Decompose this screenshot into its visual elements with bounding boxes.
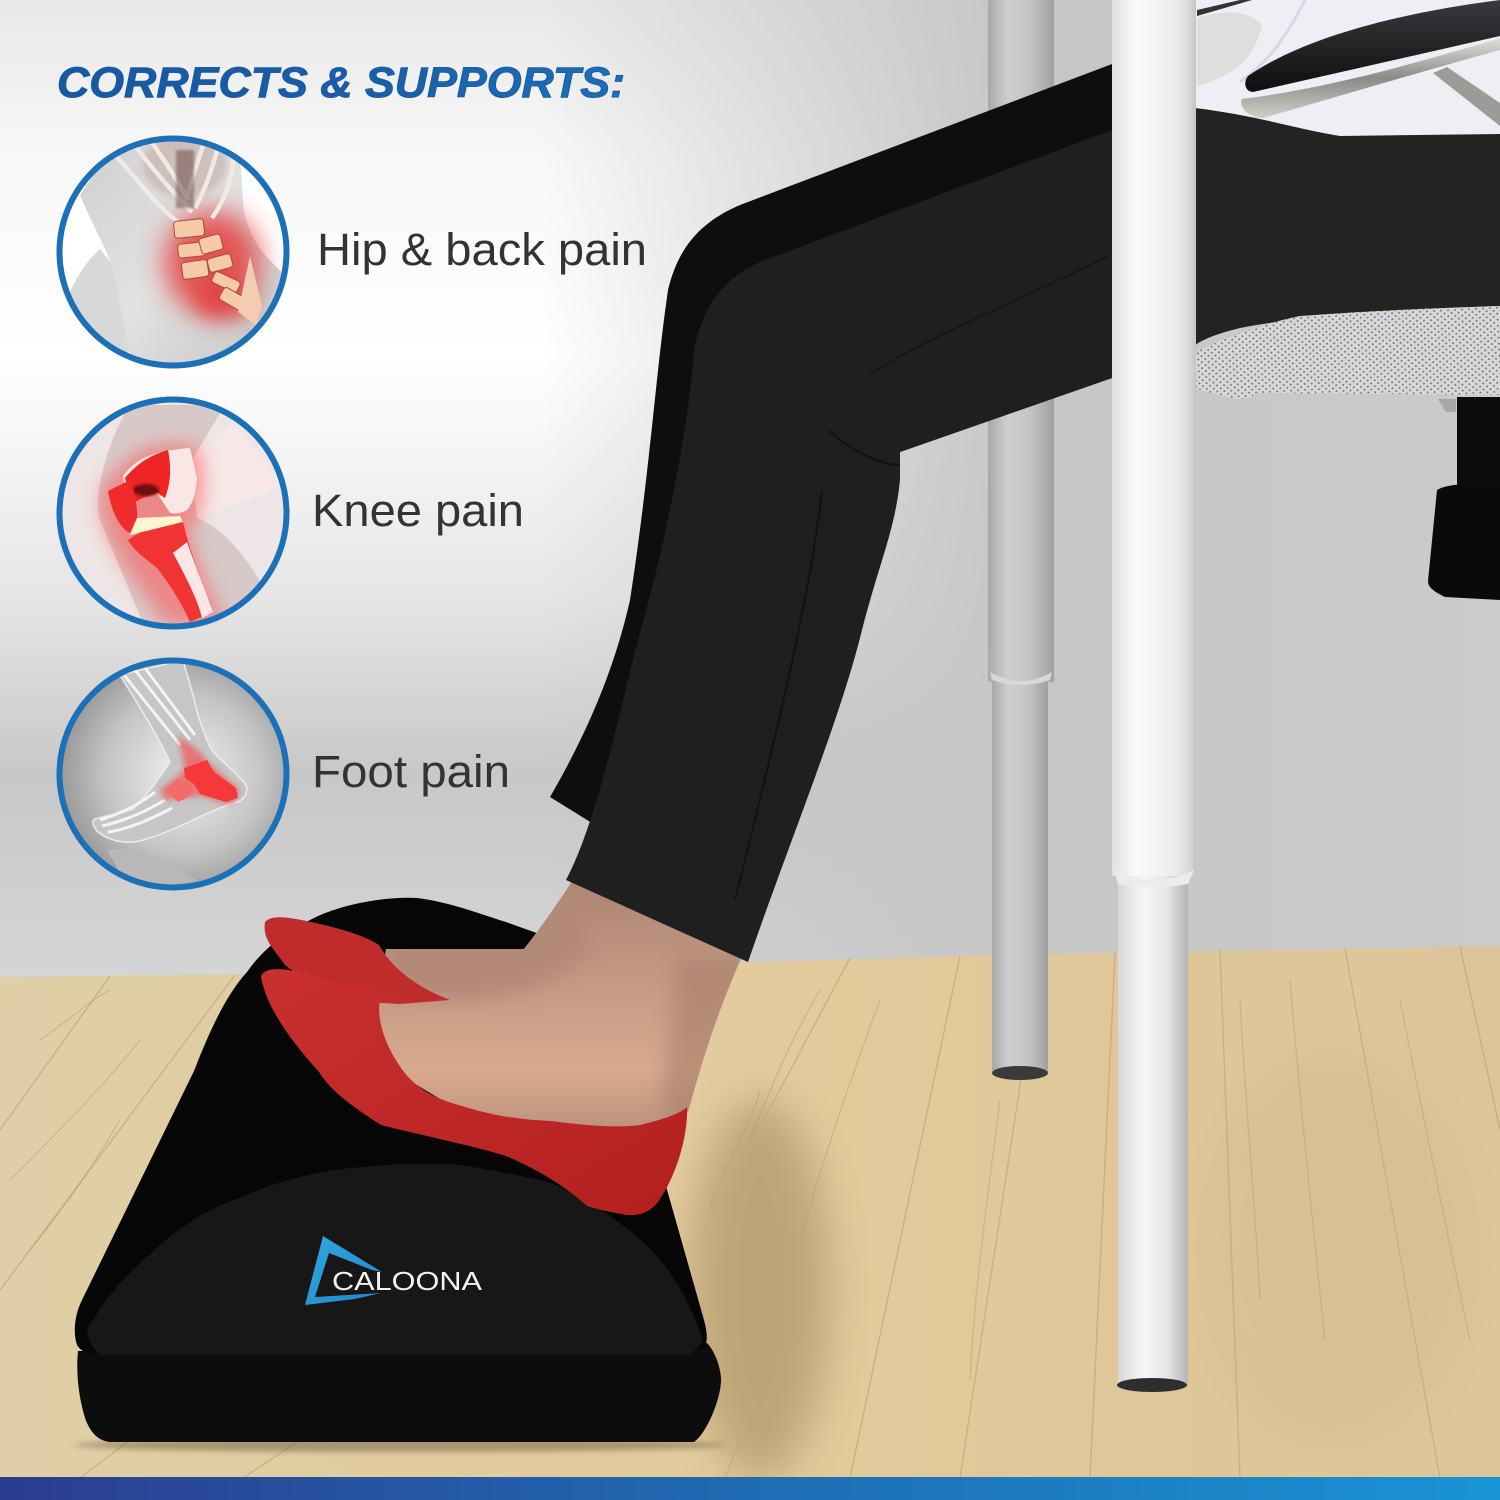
wall background: [0, 0, 1500, 990]
trousers: [550, 64, 1112, 962]
near shoe: [261, 969, 687, 1215]
upper dome: [75, 898, 707, 1354]
label: hip and back pain: Hip & back pain: [317, 224, 647, 275]
label: foot pain: Foot pain: [312, 746, 510, 797]
base layer: [77, 1343, 721, 1442]
circle: foot pain: [57, 658, 289, 890]
footrest cushion: [75, 898, 725, 1452]
chair seat: [1196, 306, 1500, 399]
desk leg: back pole: [988, 0, 1054, 1080]
logo: CALOONA: [332, 1266, 483, 1296]
feet skin: [378, 880, 750, 1135]
circle: knee pain: [57, 397, 289, 640]
title: CORRECTS & SUPPORTS:: [57, 59, 625, 107]
chair: shirt: [1190, 0, 1500, 136]
wooden floor: [0, 946, 1500, 1480]
chair column and base: [1428, 397, 1500, 600]
label: knee pain: Knee pain: [312, 485, 524, 536]
far leg: [550, 64, 1112, 828]
logo: [305, 1236, 483, 1305]
right thigh: [1195, 108, 1500, 345]
cushion shadow: [75, 1438, 725, 1452]
circle: hip and back pain: [57, 133, 290, 368]
femur: [123, 448, 197, 514]
desk leg: front pole: [1112, 0, 1196, 1392]
bottom colour bar: [0, 1477, 1500, 1500]
near leg: [566, 130, 1112, 962]
far shoe: [265, 917, 450, 1004]
patella: [108, 480, 137, 533]
tibia: [128, 522, 213, 622]
dome front face: [87, 1164, 703, 1355]
chair armrest: [1241, 0, 1500, 126]
